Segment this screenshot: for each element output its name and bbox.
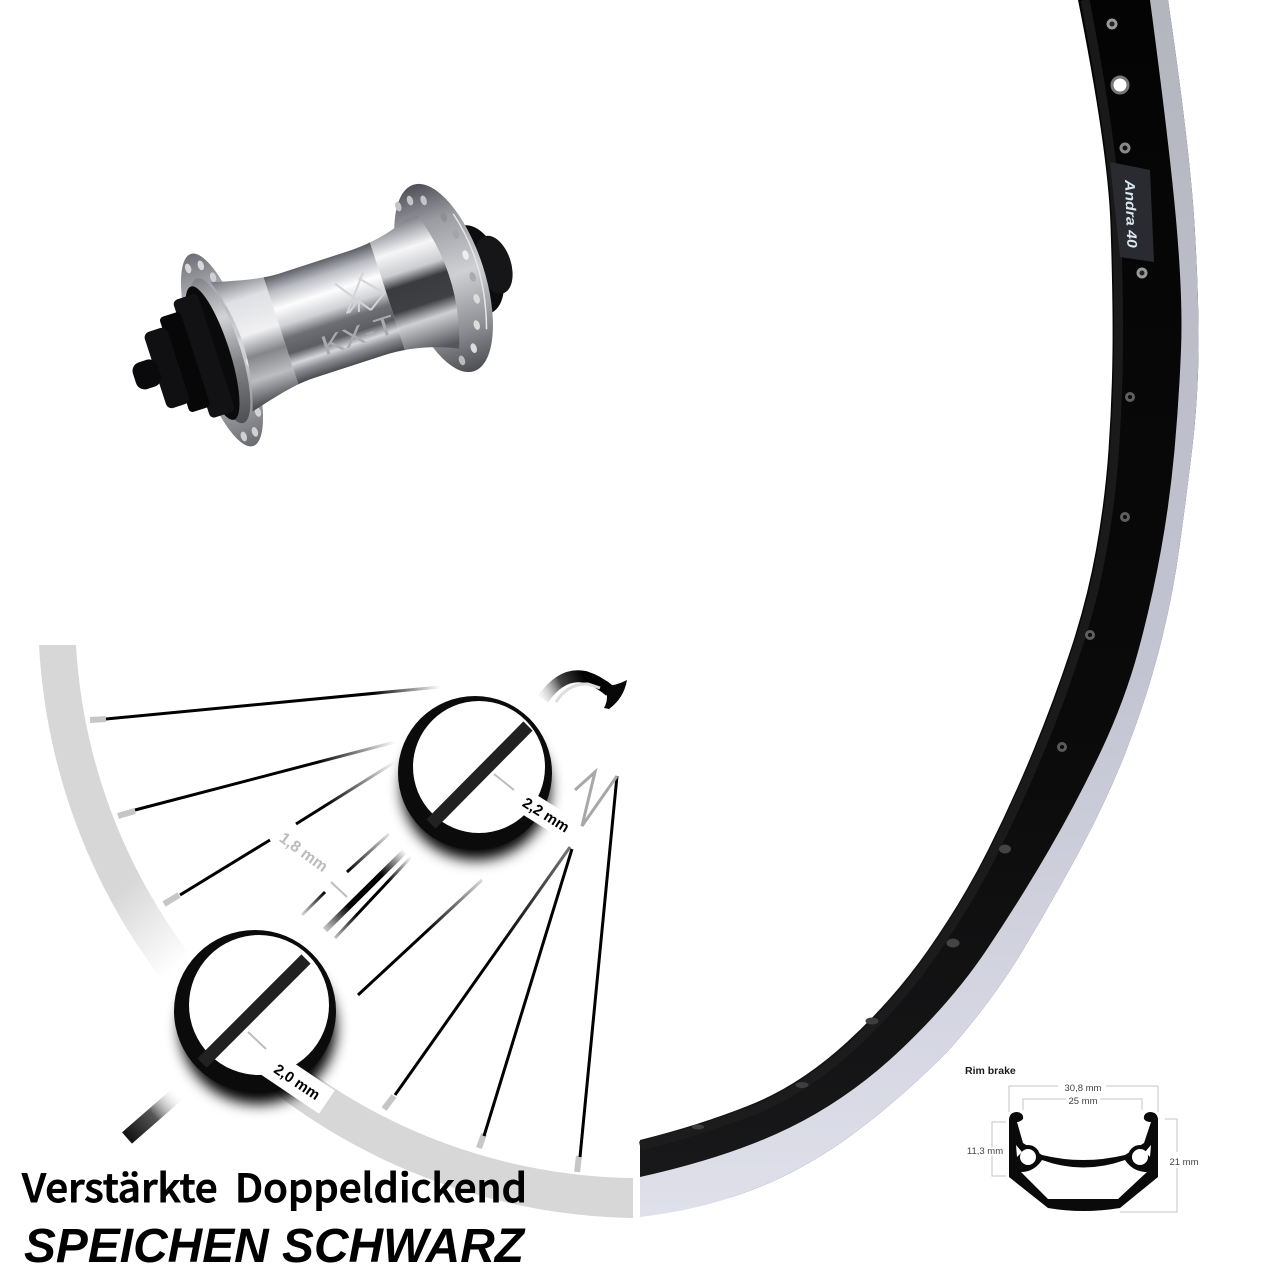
hub: right flange (374, 172, 513, 384)
1,8 mm dimension (276, 830, 347, 897)
hub: right axle nut (437, 215, 524, 321)
rim: Andra 40 decal: Andra 40 (1122, 178, 1140, 248)
rim: black and silver wheel rim arc (640, 0, 1199, 1217)
panel: spoke diagram (39, 645, 633, 1218)
hub: KX-T logo (304, 268, 399, 361)
heading: Verstärkte Doppeldickend: Verstärkte Doppeldickend (21, 1158, 527, 1214)
hub: left cone (178, 272, 263, 429)
heading: SPEICHEN SCHWARZ: SPEICHEN SCHWARZ (24, 1220, 526, 1273)
fade of the arc behind the lower lens (100, 850, 250, 1060)
rim: black body (640, 0, 1199, 1204)
hub: silver front hub with black end caps (132, 184, 513, 446)
label: 2,0 mm (259, 1050, 335, 1114)
rim profile title: Rim brake (965, 1065, 1016, 1077)
rim: silver braking surface (640, 0, 1199, 1217)
rim: spoke holes (692, 20, 1146, 1130)
dimension labels: 21 mm (1169, 1157, 1199, 1168)
dimension labels: 30,8 mm (1065, 1083, 1102, 1094)
hub: left flange (164, 245, 280, 455)
icon: curved spoke head (543, 676, 627, 709)
lens: 2,0 mm spoke (174, 930, 336, 1114)
lens: 2,2 mm spoke (398, 696, 581, 860)
gray rim arc (39, 645, 633, 1218)
label: 2,2 mm (511, 787, 581, 843)
nipples (90, 719, 579, 1172)
dimension labels: 25 mm (1068, 1096, 1098, 1107)
rim: Andra 40 decal (1110, 162, 1154, 262)
hub: KX-T logo: KX-T (317, 309, 399, 361)
spoke end stub (127, 1090, 182, 1138)
label: 2,2 mm: 2,2 mm (519, 795, 572, 836)
rim: inner edge sheen (640, 0, 1119, 1146)
hub: polished body (210, 222, 460, 412)
dimension labels (967, 1083, 1199, 1168)
rim profile diagram (965, 1065, 1199, 1212)
1,8 mm dimension: 1,8 mm (276, 830, 330, 876)
rim cross-section (1009, 1112, 1158, 1211)
label: 2,0 mm: 2,0 mm (271, 1061, 323, 1104)
dimension lines (992, 1086, 1177, 1212)
hub: left end nuts and axle (113, 281, 250, 445)
dimension labels: 11,3 mm (967, 1146, 1003, 1157)
spokes (106, 687, 617, 1157)
